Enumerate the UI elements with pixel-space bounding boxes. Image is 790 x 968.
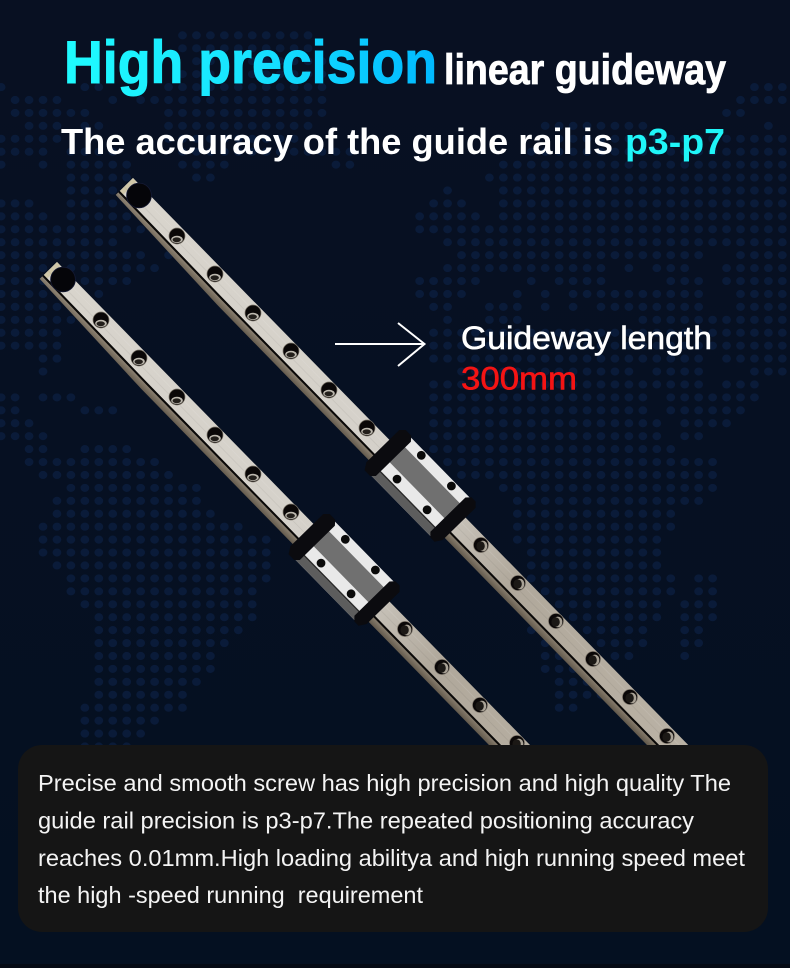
linear rail: rear [112,178,721,799]
linear rail: front [36,262,645,883]
guideway length label: Guideway length [461,320,712,356]
description text: reaches 0.01mm.High loading abilitya and high running speed meet [38,845,745,871]
description text: the high -speed running requirement [38,882,423,908]
subtitle: rail accuracy: The accuracy of the guide rail is [61,121,613,162]
title [64,29,726,96]
world map dot pattern [1,35,782,747]
title: high precision: High precision [64,29,437,96]
description text: guide rail precision is p3-p7.The repeated positioning accuracy [38,808,694,834]
description text: Precise and smooth screw has high precision and high quality The [38,770,731,796]
guideway length label [461,320,712,396]
accuracy value: p3-p7 [625,121,725,162]
length value: 300mm [461,360,577,396]
panel: description [18,745,768,932]
arrow: points to guideway length [335,323,424,366]
title: linear guideway: linear guideway [444,46,726,94]
description text [38,770,745,908]
